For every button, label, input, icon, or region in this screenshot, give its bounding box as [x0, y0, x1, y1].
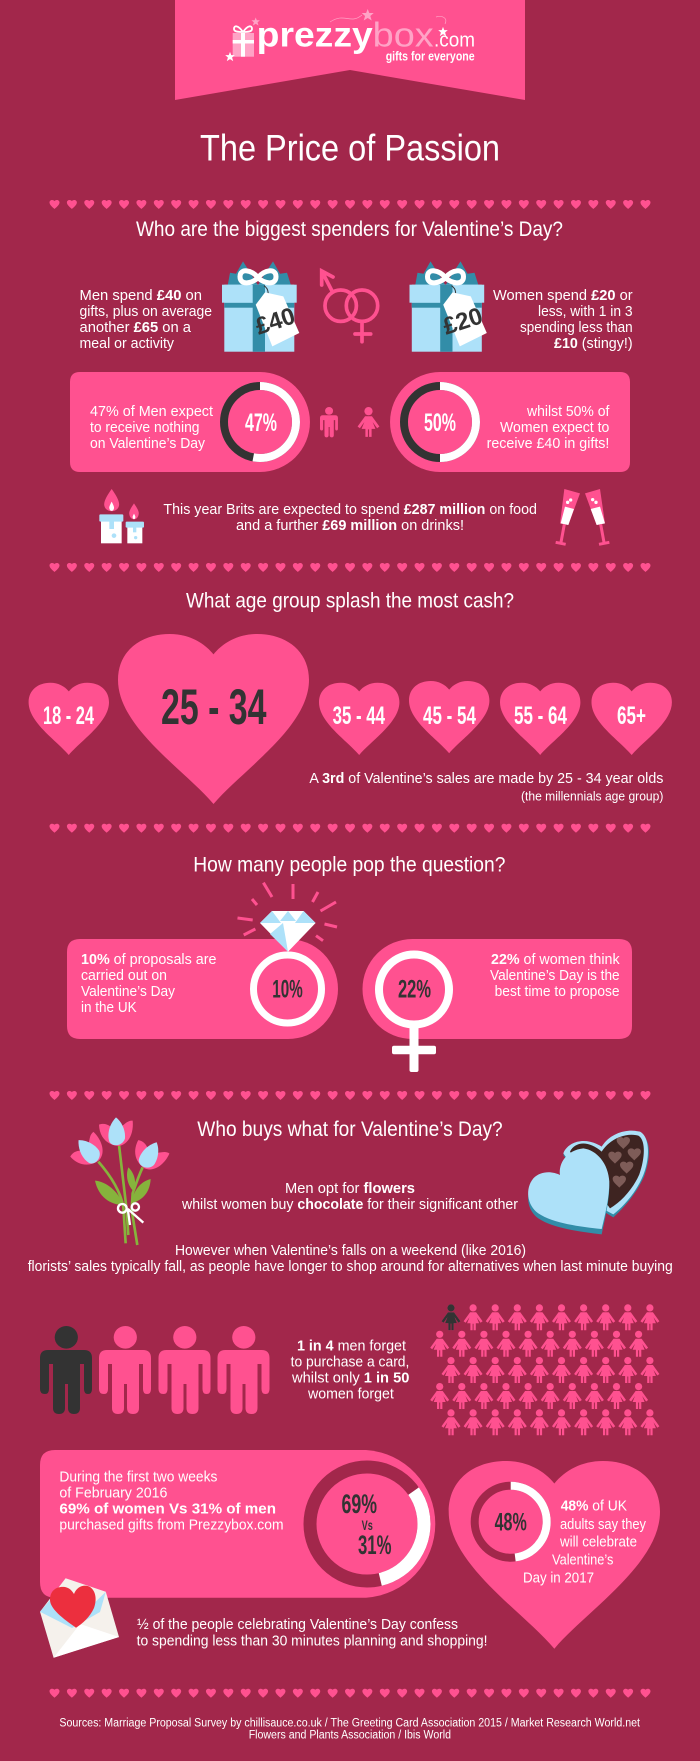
heart: celebrate 2017 — [449, 1461, 660, 1649]
text: millennials: A 3rd of Valentine’s sales are made by 25 - 34 year olds — [309, 771, 663, 787]
text: women spend: less, with 1 in 3 — [538, 304, 633, 320]
heart 45-54: 45 - 54 — [423, 702, 476, 730]
text: men spend: gifts, plus on average — [80, 304, 212, 320]
icon: candles — [99, 489, 144, 543]
text: weekend florists — [28, 1243, 673, 1275]
text: women spend — [493, 288, 633, 352]
text: flowers and chocolate — [181, 1181, 518, 1213]
heart 65+ — [592, 683, 672, 755]
text: carried out on — [81, 968, 167, 984]
heart 45-54 — [409, 681, 489, 753]
text — [487, 404, 610, 452]
text: food and drinks — [163, 502, 537, 534]
text: receive £40 in gifts! — [487, 436, 609, 452]
text: men spend: meal or activity — [80, 336, 175, 352]
text: best time to propose — [495, 984, 620, 1000]
text: women spend: spending less than — [520, 320, 633, 336]
heart 55-64: 55 - 64 — [514, 702, 567, 730]
text: half planning — [137, 1617, 488, 1649]
heart 35-44: 35 - 44 — [333, 702, 385, 730]
text: half planning: ½ of the people celebrating Valentine’s Day confess — [137, 1617, 458, 1633]
icon: small man — [320, 407, 338, 437]
text — [523, 1499, 647, 1586]
heading: age group: What age group splash the most cash? — [186, 589, 514, 613]
text: Day in 2017 — [523, 1570, 594, 1586]
heart 65+: 65+ — [617, 702, 646, 730]
text: forget a card: 1 in 4 men forget — [297, 1339, 406, 1355]
donut 69 vs 31 — [288, 1445, 446, 1603]
panel: men expect nothing — [70, 372, 310, 472]
icon: gift with £40 tag — [222, 261, 299, 352]
sources — [59, 1718, 641, 1742]
donut labels: Vs — [362, 1517, 373, 1533]
tag price: £20 — [440, 303, 486, 341]
tag price: £40 — [252, 303, 299, 341]
text: food and drinks: and a further £69 million on drinks! — [236, 518, 464, 534]
text: Valentine’s Day is the — [490, 968, 620, 984]
text: forget a card: whilst only 1 in 50 — [291, 1371, 409, 1387]
panel: women expect gifts — [390, 372, 630, 472]
donut 48% — [475, 1486, 547, 1558]
text: forget a card: women forget — [307, 1387, 394, 1403]
text: millennials: (the millennials age group) — [521, 790, 663, 804]
text: will celebrate — [559, 1535, 637, 1551]
icon: four men — [40, 1326, 270, 1414]
text: of February 2016 — [59, 1486, 167, 1502]
icon: small woman — [358, 407, 379, 437]
text: men spend — [80, 288, 212, 352]
heart 18-24: 18 - 24 — [43, 702, 94, 730]
logo wordmark: box — [373, 17, 434, 55]
text: During the first two weeks — [59, 1470, 217, 1486]
text: half planning: to spending less than 30 minutes planning and shopping! — [137, 1633, 488, 1649]
text: Valentine’s — [552, 1552, 613, 1568]
logo wordmark: .com — [434, 30, 475, 52]
text: whilst 50% of — [526, 404, 610, 420]
text: weekend florists: florists’ sales typically fall, as people have longer to shop around for alternatives when last minute buying — [28, 1259, 673, 1275]
divider hearts — [50, 563, 650, 572]
icon: heart chocolate box — [528, 1131, 649, 1234]
panel: prezzybox purchases — [40, 1445, 446, 1603]
text: forget a card — [291, 1339, 409, 1403]
donut 50% — [404, 386, 476, 458]
logo wordmark: prezzy — [257, 16, 373, 55]
heading: biggest spenders: Who are the biggest spenders for Valentine’s Day? — [136, 217, 563, 241]
text — [59, 1470, 284, 1534]
ring label: 10% — [272, 976, 303, 1004]
heading: pop the question: How many people pop the question? — [193, 853, 505, 877]
icon: gift with £20 tag — [410, 261, 487, 352]
heart 18-24 — [29, 683, 109, 755]
heart 35-44 — [319, 683, 399, 755]
text — [90, 404, 213, 452]
text: men spend: another £65 on a — [80, 320, 192, 336]
icon: envelope with heart — [40, 1578, 119, 1658]
text: in the UK — [81, 1000, 137, 1016]
sources: Flowers and Plants Association / Ibis World — [249, 1730, 451, 1742]
symbol label: 22% — [398, 976, 431, 1004]
text: adults say they — [560, 1517, 647, 1533]
text: to receive nothing — [90, 420, 200, 436]
text: flowers and chocolate: whilst women buy chocolate for their significant other — [181, 1197, 518, 1213]
icon: champagne glasses — [556, 489, 609, 544]
text: 47% of Men expect — [90, 404, 213, 420]
heart 25-34 — [118, 634, 309, 804]
logo wordmark — [257, 16, 475, 55]
age hearts — [29, 634, 672, 804]
text: weekend florists: However when Valentine’s falls on a weekend (like 2016) — [175, 1243, 526, 1259]
text: men spend: Men spend £40 on — [80, 288, 202, 304]
text: Valentine’s Day — [81, 984, 176, 1000]
donut labels: 31% — [358, 1530, 392, 1560]
icon: fifty women — [430, 1304, 659, 1435]
icon: gender symbols — [322, 271, 378, 342]
divider hearts — [50, 1091, 650, 1100]
heart 25-34: 25 - 34 — [161, 679, 267, 735]
text: forget a card: to purchase a card, — [291, 1355, 409, 1371]
text: 22% of women think — [491, 952, 620, 968]
text: flowers and chocolate: Men opt for flowers — [285, 1181, 415, 1197]
donut 47% — [224, 386, 296, 458]
text: millennials — [309, 771, 663, 804]
icon: diamond ring — [238, 883, 337, 1023]
donut label: 47% — [245, 409, 277, 437]
logo tagline: gifts for everyone — [386, 50, 475, 64]
divider hearts — [50, 1689, 650, 1698]
text: 48% of UK — [561, 1499, 627, 1515]
text: 69% of women Vs 31% of men — [59, 1502, 276, 1518]
divider hearts — [50, 200, 650, 209]
icon: tulip bouquet — [66, 1117, 171, 1245]
donut labels: 69% — [342, 1489, 377, 1519]
donut label: 48% — [495, 1509, 527, 1537]
divider hearts — [50, 824, 650, 833]
logo stars — [225, 9, 448, 61]
title: The Price of Passion — [200, 128, 500, 169]
icon: logo gift — [233, 26, 254, 57]
text: 10% of proposals are — [81, 952, 216, 968]
heading: who buys what: Who buys what for Valentine’s Day? — [197, 1117, 503, 1141]
panel: proposals — [67, 883, 338, 1039]
heart 55-64 — [500, 683, 580, 755]
panel: best time to propose — [362, 939, 632, 1072]
icon: female symbol — [379, 954, 449, 1072]
text — [81, 952, 216, 1016]
text: purchased gifts from Prezzybox.com — [59, 1518, 284, 1534]
text: food and drinks: This year Brits are expected to spend £287 million on food — [163, 502, 537, 518]
text: Women expect to — [500, 420, 609, 436]
text: women spend: £10 (stingy!) — [554, 336, 633, 352]
text — [490, 952, 620, 1000]
donut label: 50% — [424, 409, 456, 437]
text: women spend: Women spend £20 or — [493, 288, 633, 304]
header banner with logo — [175, 0, 525, 100]
donut labels — [342, 1489, 392, 1560]
text: on Valentine’s Day — [90, 436, 206, 452]
sources: Sources: Marriage Proposal Survey by chillisauce.co.uk / The Greeting Card Association 2015 / Market Research World.net — [59, 1718, 641, 1730]
